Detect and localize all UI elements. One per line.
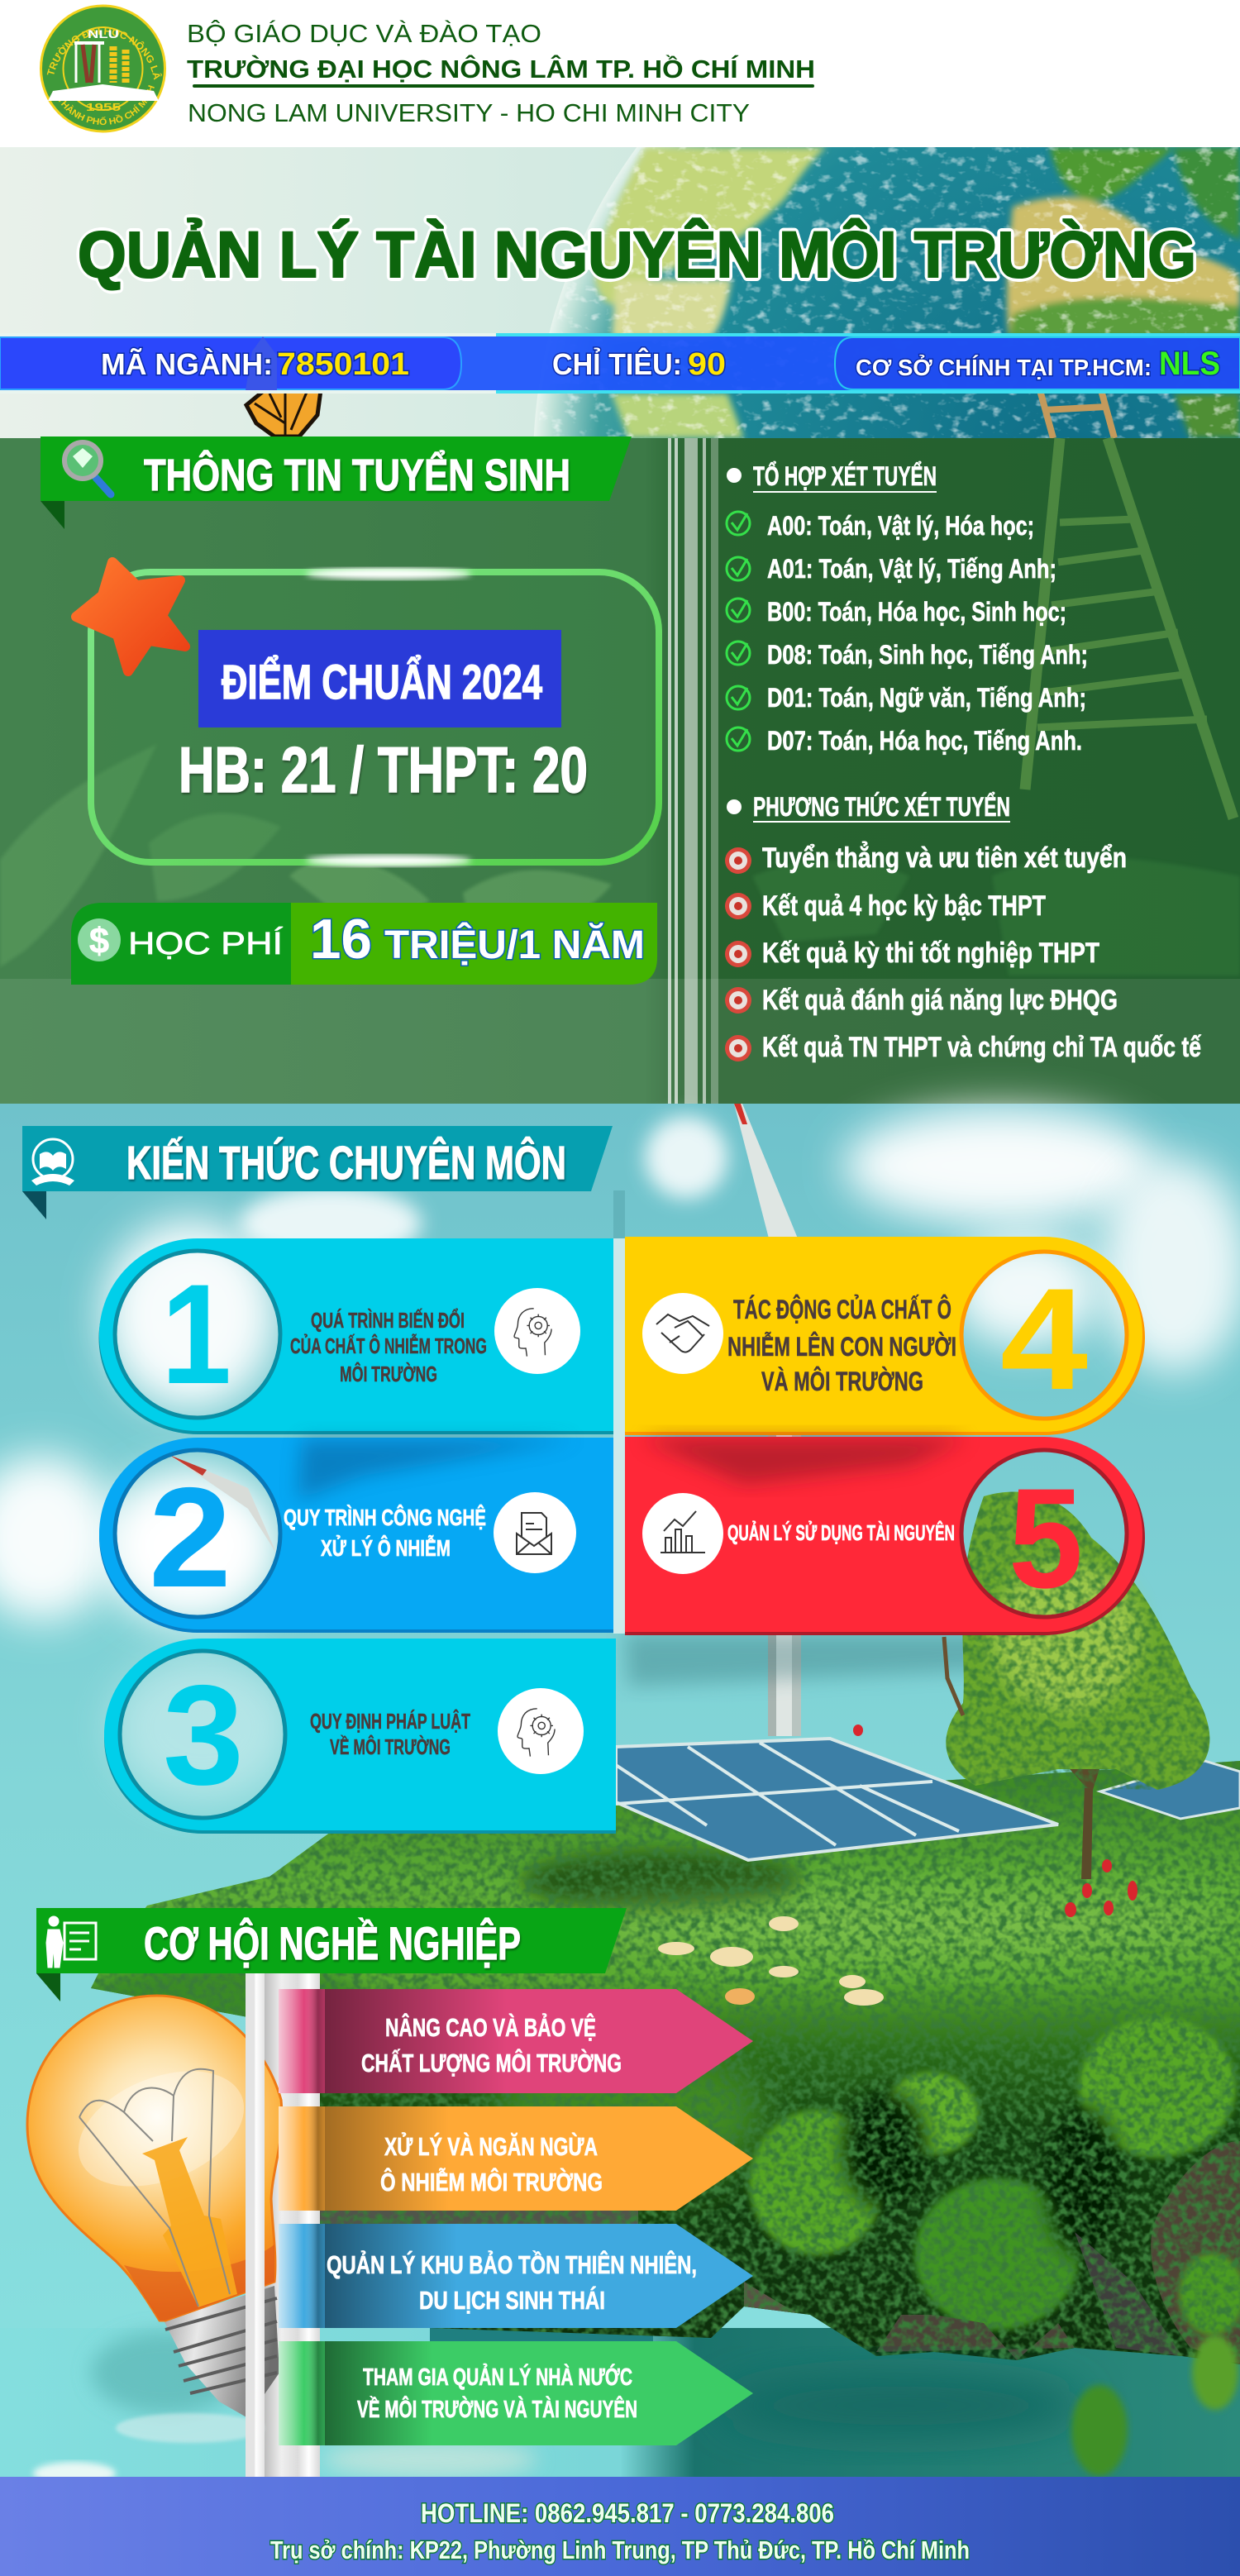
section heading: career opportunities [36, 1908, 627, 2001]
arrow 1: environmental protection: NÂNG CAO VÀ BẢO VỆ [385, 2012, 596, 2042]
list: subject combinations: D08: Toán, Sinh học, Tiếng Anh; [767, 640, 1088, 670]
card 5: 5 [1009, 1459, 1083, 1618]
card 4 text [727, 1295, 956, 1396]
arrow 2: pollution treatment: Ô NHIỄM MÔI TRƯỜNG [380, 2167, 603, 2197]
arrow 3: conservation [279, 2224, 753, 2328]
bar text: quota: 90 [688, 347, 726, 382]
list: subject combinations [727, 461, 1088, 756]
header text: english name: NONG LAM UNIVERSITY - HO CHI MINH CITY [188, 98, 750, 127]
bar text: major code [101, 346, 409, 382]
header text: university name: TRƯỜNG ĐẠI HỌC NÔNG LÂM TP. HỒ CHÍ MINH [187, 54, 815, 83]
icon: university logo [40, 5, 166, 132]
icon: university logo: 1955 [86, 101, 121, 113]
arrow 4: state management: VỀ MÔI TRƯỜNG VÀ TÀI NGUYÊN [357, 2395, 637, 2423]
icon: dollar: $ [89, 921, 109, 961]
tuition bar: HỌC PHÍ [128, 926, 284, 961]
card 2 text [284, 1504, 486, 1561]
scene: grassy island [0, 1724, 1240, 2476]
panel: cutoff score [76, 562, 659, 866]
flowers [658, 1724, 1137, 2006]
footer: hotline: HOTLINE: 0862.945.817 - 0773.284.806 [421, 2498, 834, 2528]
list: admission methods [725, 792, 1201, 1063]
arrow 1: environmental protection [279, 1989, 753, 2093]
bar text: campus: CƠ SỞ CHÍNH TẠI TP.HCM: [856, 354, 1152, 380]
decorative stripes [668, 438, 718, 1104]
icon: university logo: THÀNH PHỐ HỒ CHÍ MINH [58, 84, 155, 126]
list: admission methods: Kết quả 4 học kỳ bậc THPT [762, 890, 1046, 922]
card 1 text: CỦA CHẤT Ô NHIỄM TRONG [290, 1333, 487, 1358]
scene: solar panels [616, 1739, 1240, 1860]
arrow 4: state management [279, 2341, 753, 2445]
icon: orange star [76, 562, 185, 671]
card 2 text: QUY TRÌNH CÔNG NGHỆ [284, 1504, 486, 1530]
list: subject combinations: D07: Toán, Hóa học, Tiếng Anh. [767, 726, 1082, 756]
cutoff label: ĐIỂM CHUẨN 2024 [222, 656, 542, 709]
card 3 text: QUY ĐỊNH PHÁP LUẬT [310, 1709, 470, 1734]
icon: magnifier [64, 442, 111, 494]
footer [0, 2477, 1240, 2576]
list: subject combinations: B00: Toán, Hóa học, Sinh học; [767, 597, 1066, 627]
icon: growth chart [642, 1493, 723, 1574]
list: admission methods: Kết quả đánh giá năng lực ĐHQG [762, 985, 1118, 1016]
arrow 2: pollution treatment [279, 2106, 753, 2211]
scene: clouds in the sky [0, 1108, 1240, 1802]
card 3 [104, 1639, 616, 1834]
list: subject combinations: D01: Toán, Ngữ văn, Tiếng Anh; [767, 683, 1086, 713]
card 3: 3 [163, 1656, 244, 1815]
list: subject combinations: A00: Toán, Vật lý, Hóa học; [767, 511, 1034, 541]
card 1 [98, 1238, 613, 1434]
card 1 text: MÔI TRƯỜNG [340, 1362, 437, 1386]
section heading: career opportunities: CƠ HỘI NGHỀ NGHIỆP [144, 1917, 521, 1969]
card 3 text: VỀ MÔI TRƯỜNG [330, 1734, 451, 1759]
arrow 3: conservation: DU LỊCH SINH THÁI [419, 2286, 605, 2315]
front pole stripe [246, 1973, 265, 2478]
arrow 1: environmental protection: CHẤT LƯỢNG MÔI TRƯỜNG [361, 2048, 622, 2077]
section heading: professional knowledge [22, 1126, 613, 1219]
header text: ministry: BỘ GIÁO DỤC VÀ ĐÀO TẠO [187, 19, 541, 48]
card 5 text: QUẢN LÝ SỬ DỤNG TÀI NGUYÊN [727, 1519, 955, 1545]
ladder [1025, 438, 1233, 818]
arrow 3: conservation: QUẢN LÝ KHU BẢO TỒN THIÊN NHIÊN, [327, 2249, 697, 2279]
bar text: campus: NLS [1159, 346, 1220, 382]
info bar: code, quota and campus [0, 333, 1240, 394]
icon: head with gear [494, 1288, 580, 1374]
icon: dollar [78, 918, 121, 961]
icon: handshake [642, 1293, 723, 1374]
header band with university identity [40, 5, 815, 132]
bar text: campus [856, 346, 1220, 382]
center gap between cards [613, 1190, 625, 1634]
icon: head with gear [498, 1688, 584, 1774]
icon: open book crest [31, 1139, 74, 1185]
card 4 [625, 1237, 1145, 1435]
panel: admissions information [0, 438, 1240, 1104]
bar text: major code: 7850101 [277, 347, 409, 382]
tuition bar [71, 903, 657, 985]
cutoff values: HB: 21 / THPT: 20 [179, 733, 588, 806]
card 4 text: NHIỄM LÊN CON NGƯỜI [727, 1332, 956, 1362]
card 2 [99, 1438, 613, 1633]
title: QUẢN LÝ TÀI NGUYÊN MÔI TRƯỜNG [78, 217, 1196, 291]
scene: tree [934, 1488, 1223, 1879]
bar text: major code: MÃ NGÀNH: [101, 346, 273, 381]
section heading: admissions [41, 436, 632, 529]
icon: university logo: NLU [88, 27, 119, 41]
icon: envelope [494, 1492, 576, 1573]
card 4: 4 [1000, 1259, 1088, 1420]
back pole for signboards [265, 1973, 320, 2478]
card 3 text [310, 1709, 470, 1759]
icon: light bulb [27, 1996, 282, 2443]
list: admission methods: PHƯƠNG THỨC XÉT TUYỂN [753, 792, 1010, 822]
scene: wind turbine [169, 1104, 1075, 1736]
card 1 text [290, 1308, 487, 1386]
list: admission methods: Kết quả kỳ thi tốt nghiệp THPT [762, 937, 1099, 969]
tuition bar: TRIỆU/1 NĂM [384, 922, 645, 967]
card 2: 2 [149, 1458, 231, 1617]
card 4 text: TÁC ĐỘNG CỦA CHẤT Ô [733, 1295, 951, 1324]
icon: presenter at board [46, 1916, 96, 1968]
card 1 text: QUÁ TRÌNH BIẾN ĐỔI [311, 1308, 465, 1333]
scene: water below the island [0, 2328, 1240, 2485]
tuition bar: 16 [310, 908, 372, 971]
card 1: 1 [161, 1255, 231, 1414]
card 4 text: VÀ MÔI TRƯỜNG [761, 1367, 923, 1396]
section heading: professional knowledge: KIẾN THỨC CHUYÊN MÔN [126, 1136, 566, 1190]
list: subject combinations: TỔ HỢP XÉT TUYỂN [753, 461, 937, 491]
ladder top in hero [1040, 390, 1114, 438]
arrow 4: state management: THAM GIA QUẢN LÝ NHÀ NƯỚC [363, 2363, 632, 2391]
bar text: quota: CHỈ TIÊU: [552, 346, 682, 381]
icon: butterfly [246, 390, 321, 436]
section heading: admissions: THÔNG TIN TUYỂN SINH [144, 450, 570, 500]
list: admission methods: Tuyển thẳng và ưu tiên xét tuyển [762, 842, 1127, 874]
list: subject combinations: A01: Toán, Vật lý, Tiếng Anh; [767, 554, 1056, 584]
arrow 2: pollution treatment: XỬ LÝ VÀ NGĂN NGỪA [384, 2131, 598, 2161]
footer: address: Trụ sở chính: KP22, Phường Linh Trung, TP Thủ Đức, TP. Hồ Chí Minh [270, 2535, 970, 2564]
cutoff label [198, 630, 561, 727]
card 5 [625, 1437, 1145, 1635]
globe illustration [534, 147, 1240, 438]
card 2 text: XỬ LÝ Ô NHIỄM [321, 1534, 451, 1561]
